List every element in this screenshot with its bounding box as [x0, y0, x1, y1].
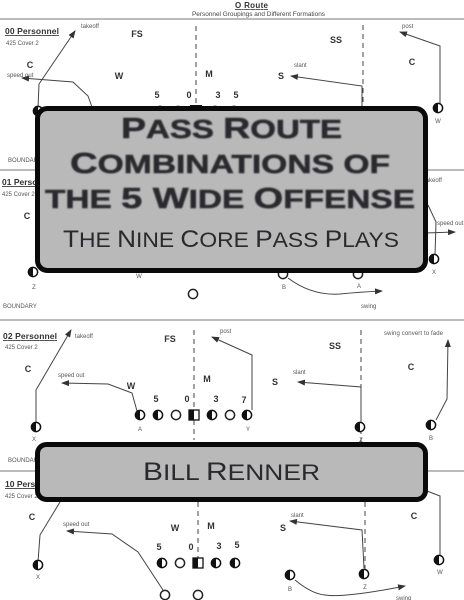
panel: 00 personnel: C [27, 60, 34, 70]
panel: 10 personnel: C [411, 511, 418, 521]
panel: 10 personnel: 3 [216, 541, 222, 551]
title text: C OMBINATIONS OF [70, 148, 390, 180]
panel: 01 personnel: W [136, 274, 142, 280]
panel: 01 personnel [2, 177, 464, 310]
panel: 00 personnel: M [205, 69, 213, 79]
panel: 02 personnel: takeoff [75, 334, 93, 340]
panel: 01 personnel: Z [32, 285, 36, 291]
panel: 10 personnel: W [171, 523, 180, 533]
panel: 10 personnel: S [280, 523, 286, 533]
panel: 02 personnel: W [127, 381, 136, 391]
panel: 01 personnel: swing [361, 304, 376, 310]
panel: 02 personnel: B [429, 436, 433, 442]
panel: 02 personnel: M [203, 374, 211, 384]
panel: 10 personnel: X [36, 575, 40, 581]
panel: 01 personnel: B [282, 285, 286, 291]
panel: 00 personnel: W [435, 119, 441, 125]
panel: 00 personnel: 00 Personnel [5, 26, 59, 36]
panel: 00 personnel: BOUNDARY [8, 158, 42, 164]
panel: 02 personnel: FS [164, 334, 176, 344]
panel: 10 personnel: slant [291, 513, 304, 519]
panel: 02 personnel: S [272, 377, 278, 387]
panel: 01 personnel: 01 Personnel [2, 177, 55, 187]
panel: 02 personnel: 425 Cover 2 [5, 345, 38, 351]
title text: THE 5 W IDE O FFENSE [45, 183, 415, 215]
panel: 10 personnel: 5 [234, 540, 240, 550]
panel: 10 personnel: speed out [63, 522, 90, 528]
panel: 01 personnel: 425 Cover 2 [2, 192, 35, 198]
panel: 02 personnel: X [32, 437, 36, 443]
panel: 00 personnel: 425 Cover 2 [6, 41, 39, 47]
panel: 02 personnel: 0 [184, 394, 190, 404]
panel: 10 personnel [5, 479, 444, 600]
panel: 00 personnel: 5 [154, 90, 160, 100]
panel: 01 personnel: C [24, 211, 31, 221]
panel: 02 personnel [3, 329, 448, 464]
panel: 02 personnel: slant [293, 370, 306, 376]
panel: 02 personnel: 3 [213, 394, 219, 404]
panel: 10 personnel: Z [363, 585, 367, 591]
panel: 10 personnel: 5 [156, 542, 162, 552]
panel: 02 personnel: Z [359, 438, 363, 444]
panel: 00 personnel: 0 [186, 90, 192, 100]
sheet heading: O Route [235, 1, 269, 10]
title text: PASS ROUTE [121, 113, 342, 145]
panel: 00 personnel: 3 [215, 90, 221, 100]
panel: 01 personnel: A [357, 284, 361, 290]
panel: 00 personnel: slant [294, 63, 307, 69]
panel: 02 personnel: speed out [58, 373, 85, 379]
panel: 02 personnel: swing convert to fade [384, 331, 444, 337]
sheet heading: Personnel Groupings and Different Formations [192, 11, 325, 18]
panel: 02 personnel: post [220, 329, 232, 335]
panel: 10 personnel: 10 Personnel [5, 479, 58, 489]
panel: 02 personnel: C [25, 364, 32, 374]
panel: 01 personnel: X [432, 270, 436, 276]
author box [38, 444, 426, 500]
panel: 00 personnel: SS [330, 35, 342, 45]
panel: 00 personnel: W [115, 71, 124, 81]
panel: 00 personnel: 5 [233, 90, 239, 100]
panel: 00 personnel: FS [131, 29, 143, 39]
panel: 01 personnel: takeoff [424, 178, 442, 184]
panel: 10 personnel: 0 [188, 542, 194, 552]
title text [45, 113, 415, 215]
panel: 10 personnel: C [29, 512, 36, 522]
panel: 00 personnel: S [278, 71, 284, 81]
title box [38, 108, 426, 270]
panel: 02 personnel: 5 [153, 394, 159, 404]
subtitle: THE NINE CORE PASS PLAYS [63, 226, 399, 253]
panel: 00 personnel: takeoff [81, 24, 99, 30]
panel: 10 personnel: B [288, 587, 292, 593]
panel: 10 personnel: M [207, 521, 215, 531]
panel: 02 personnel: BOUNDARY [8, 458, 42, 464]
panel: 00 personnel: speed out [7, 73, 34, 79]
panel: 02 personnel: A [138, 427, 142, 433]
panel: 10 personnel: W [437, 570, 443, 576]
panel: 02 personnel: SS [329, 341, 341, 351]
panel: 00 personnel [5, 24, 443, 164]
panel: 01 personnel: BOUNDARY [3, 304, 37, 310]
panel: 02 personnel: 7 [241, 395, 247, 405]
panel: 02 personnel: 02 Personnel [3, 331, 57, 341]
panel: 10 personnel: 425 Cover 2 [5, 494, 38, 500]
panel: 00 personnel: C [409, 57, 416, 67]
panel: 02 personnel: Y [246, 427, 250, 433]
panel: 00 personnel: post [402, 24, 414, 30]
author name: BILL RENNER [143, 458, 320, 486]
panel: 02 personnel: C [408, 362, 415, 372]
sheet heading [192, 1, 325, 18]
panel: 01 personnel: speed out [437, 221, 464, 227]
